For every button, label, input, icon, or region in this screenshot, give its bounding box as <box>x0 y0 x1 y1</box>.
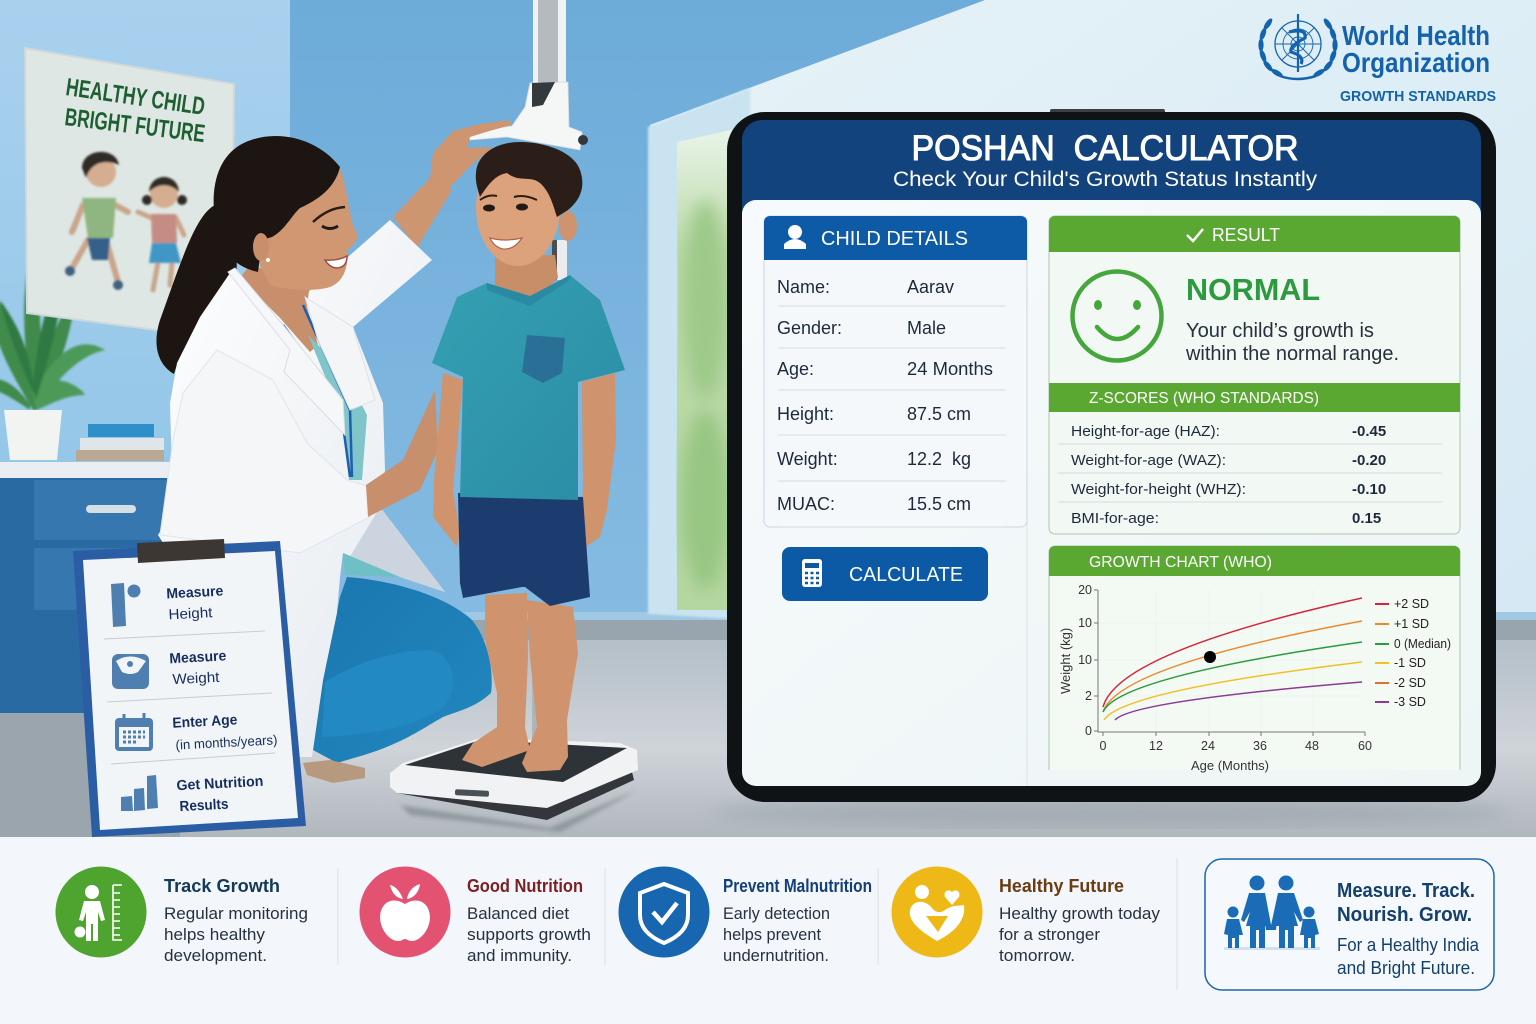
axis labels: 60 <box>1358 739 1372 753</box>
icon: family <box>1224 876 1320 950</box>
poster title <box>63 73 207 148</box>
z-score rows: Weight-for-height (WHZ): <box>1071 481 1246 498</box>
child detail rows: Male <box>907 318 946 338</box>
chart legend: +1 SD <box>1394 617 1429 631</box>
panel: child details <box>764 216 1027 527</box>
item: good nutrition: Balanced diet <box>467 905 569 923</box>
z-score rows: -0.45 <box>1352 423 1386 440</box>
poster title: HEALTHY CHILD <box>64 73 207 121</box>
item: healthy future <box>892 866 1161 965</box>
chart legend: -2 SD <box>1394 676 1426 690</box>
step: get results: Results <box>179 797 229 815</box>
poster title: BRIGHT FUTURE <box>63 103 207 148</box>
stadiometer pole <box>532 240 567 740</box>
child detail rows: Age: <box>777 359 814 379</box>
shirt pocket <box>522 335 565 383</box>
neck <box>495 255 558 305</box>
tablet reflection shadow <box>710 798 1510 826</box>
step: measure height: Height <box>168 605 213 623</box>
child detail rows: 24 Months <box>907 359 993 379</box>
item: good nutrition: supports growth <box>467 926 591 944</box>
child detail rows <box>777 277 993 514</box>
ear <box>559 211 577 241</box>
scale shadow <box>400 790 636 832</box>
item: prevent malnutrition: helps prevent <box>723 926 821 944</box>
axis labels: 10 <box>1078 616 1092 630</box>
axis labels: 0 <box>1100 739 1107 753</box>
step: enter age <box>115 710 278 753</box>
growth curves <box>1103 598 1362 720</box>
child detail rows: Name: <box>777 277 830 297</box>
panel: growth chart <box>1049 546 1460 773</box>
icon: apple <box>360 866 450 958</box>
shoe <box>303 760 365 783</box>
icon: smiley <box>1072 272 1162 360</box>
stadiometer head <box>467 0 588 150</box>
chart heading: GROWTH CHART (WHO) <box>1089 554 1272 571</box>
axis labels: Age (Months) <box>1191 758 1269 773</box>
child detail rows: 15.5 cm <box>907 494 971 514</box>
result heading: RESULT <box>1212 225 1280 245</box>
axis labels: 12 <box>1149 739 1163 753</box>
z-score rows <box>1071 423 1386 527</box>
arm sleeve <box>160 350 370 553</box>
hair <box>214 136 340 272</box>
item: good nutrition <box>360 866 591 965</box>
tablet header: POSHAN CALCULATOR <box>912 129 1298 168</box>
head <box>255 168 358 290</box>
tablet <box>727 109 1496 802</box>
child detail rows: MUAC: <box>777 494 835 514</box>
icon: shield <box>618 866 710 958</box>
poster children <box>65 152 187 290</box>
child detail rows: Weight: <box>777 449 838 469</box>
scrub hem <box>343 553 400 577</box>
face <box>480 196 537 249</box>
health worker <box>156 136 492 783</box>
poster <box>25 48 234 340</box>
icon: calculator <box>802 559 822 587</box>
axis labels: 36 <box>1253 739 1267 753</box>
item: track growth <box>56 866 308 965</box>
axes <box>1094 590 1365 736</box>
step: measure weight: Weight <box>172 670 220 688</box>
z-score rows: Weight-for-age (WAZ): <box>1071 452 1226 469</box>
scale base <box>397 772 634 820</box>
lanyard <box>283 305 352 477</box>
WHO wordmark <box>1340 20 1496 105</box>
heading: CHILD DETAILS <box>821 227 968 250</box>
plant fronds <box>0 258 105 410</box>
axis labels: 2 <box>1085 689 1092 703</box>
item: track growth: development. <box>164 947 267 965</box>
item: track growth: Regular monitoring <box>164 905 308 923</box>
result message <box>1185 320 1399 365</box>
child detail rows: 87.5 cm <box>907 404 971 424</box>
chart legend: -3 SD <box>1394 695 1426 709</box>
bottom benefits strip <box>0 837 1536 1024</box>
item: good nutrition: Good Nutrition <box>467 876 583 896</box>
step: measure weight: Measure <box>169 648 227 667</box>
legs and feet <box>462 593 578 772</box>
trousers <box>313 577 492 763</box>
item: prevent malnutrition: undernutrition. <box>723 947 829 965</box>
icon: family heart <box>892 866 982 958</box>
step: measure weight <box>112 648 228 689</box>
result message: Your child’s growth is <box>1186 320 1374 342</box>
child detail rows: Gender: <box>777 318 842 338</box>
clipboard <box>73 539 306 837</box>
item: track growth: Track Growth <box>164 876 280 896</box>
icon: person <box>784 225 806 249</box>
step: get results: Get Nutrition <box>176 774 264 794</box>
axis labels <box>1058 583 1372 773</box>
ear <box>253 233 269 261</box>
callout: measure track nourish grow: and Bright Future. <box>1337 958 1475 978</box>
tablet header <box>893 129 1318 191</box>
axis labels: 0 <box>1085 724 1092 738</box>
arms and hands <box>433 373 463 547</box>
raised hand <box>430 120 511 190</box>
item: healthy future: tomorrow. <box>999 947 1075 965</box>
WHO wordmark: Organization <box>1342 47 1490 78</box>
item: healthy future: for a stronger <box>999 926 1101 944</box>
panel: result <box>1049 216 1460 534</box>
z-score rows: BMI-for-age: <box>1071 510 1159 527</box>
child detail rows: 12.2 kg <box>907 449 971 469</box>
lab coat <box>158 220 445 757</box>
callout: measure track nourish grow: For a Healthy India <box>1337 935 1480 955</box>
callout: measure track nourish grow: Measure. Track. <box>1337 880 1475 902</box>
callout: measure track nourish grow: Nourish. Grow. <box>1337 904 1472 926</box>
callout: measure track nourish grow <box>1205 859 1494 990</box>
WHO logo <box>1258 14 1496 105</box>
z-score rows: Height-for-age (HAZ): <box>1071 423 1220 440</box>
head <box>476 150 560 266</box>
chart legend: 0 (Median) <box>1394 637 1451 651</box>
face <box>266 207 347 268</box>
step: enter age: (in months/years) <box>175 732 278 753</box>
chart legend: -1 SD <box>1394 656 1426 670</box>
hair <box>476 142 582 217</box>
scale <box>390 738 638 832</box>
WHO wordmark: World Health <box>1342 20 1490 51</box>
z-score rows: 0.15 <box>1352 510 1381 527</box>
chart legend: +2 SD <box>1394 597 1429 611</box>
child data point <box>1204 651 1216 663</box>
screen content <box>742 200 1481 786</box>
coat flap <box>348 507 445 592</box>
cabinet <box>0 462 176 713</box>
lower forearm <box>366 390 438 517</box>
axis labels: 24 <box>1201 739 1215 753</box>
shirt <box>432 275 625 500</box>
item: healthy future: Healthy growth today <box>999 905 1161 923</box>
z-scores heading: Z-SCORES (WHO STANDARDS) <box>1089 390 1319 407</box>
child detail rows: Height: <box>777 404 834 424</box>
scrub top <box>308 335 367 480</box>
step: measure height: Measure <box>166 584 224 602</box>
icon: child with ruler <box>56 866 146 958</box>
step: get results <box>121 774 265 815</box>
result message: within the normal range. <box>1185 343 1399 365</box>
axis labels: Weight (kg) <box>1058 628 1073 694</box>
item: prevent malnutrition: Early detection <box>723 905 830 923</box>
neck <box>240 265 318 352</box>
item: healthy future: Healthy Future <box>999 876 1124 896</box>
collar <box>228 268 345 435</box>
calculate button <box>782 547 988 601</box>
item: prevent malnutrition: Prevent Malnutrition <box>723 876 872 896</box>
shorts <box>458 493 590 606</box>
axis labels: 48 <box>1305 739 1319 753</box>
WHO emblem <box>1258 14 1338 79</box>
calculate button: CALCULATE <box>849 564 963 586</box>
axis labels: 10 <box>1078 653 1092 667</box>
item: good nutrition: and immunity. <box>467 947 572 965</box>
tablet header: Check Your Child's Growth Status Instantly <box>893 168 1318 191</box>
WHO wordmark: GROWTH STANDARDS <box>1340 88 1496 105</box>
z-score rows: -0.10 <box>1352 481 1386 498</box>
child <box>432 142 625 772</box>
item: prevent malnutrition <box>618 866 872 965</box>
ponytail <box>156 205 237 374</box>
result status: NORMAL <box>1186 272 1320 307</box>
plant and books <box>0 258 164 461</box>
scale platform <box>405 740 627 782</box>
item: track growth: helps healthy <box>164 926 266 944</box>
window <box>648 88 750 620</box>
headpiece <box>467 82 582 150</box>
scale body <box>390 738 638 808</box>
step: measure height <box>111 583 225 627</box>
step: enter age: Enter Age <box>172 712 238 732</box>
child detail rows: Aarav <box>907 277 954 297</box>
clipboard clip <box>137 539 225 563</box>
z-scores heading <box>1049 383 1460 412</box>
z-score rows: -0.20 <box>1352 452 1386 469</box>
raised forearm <box>393 178 452 248</box>
axis labels: 20 <box>1078 583 1092 597</box>
chart legend <box>1375 597 1451 709</box>
